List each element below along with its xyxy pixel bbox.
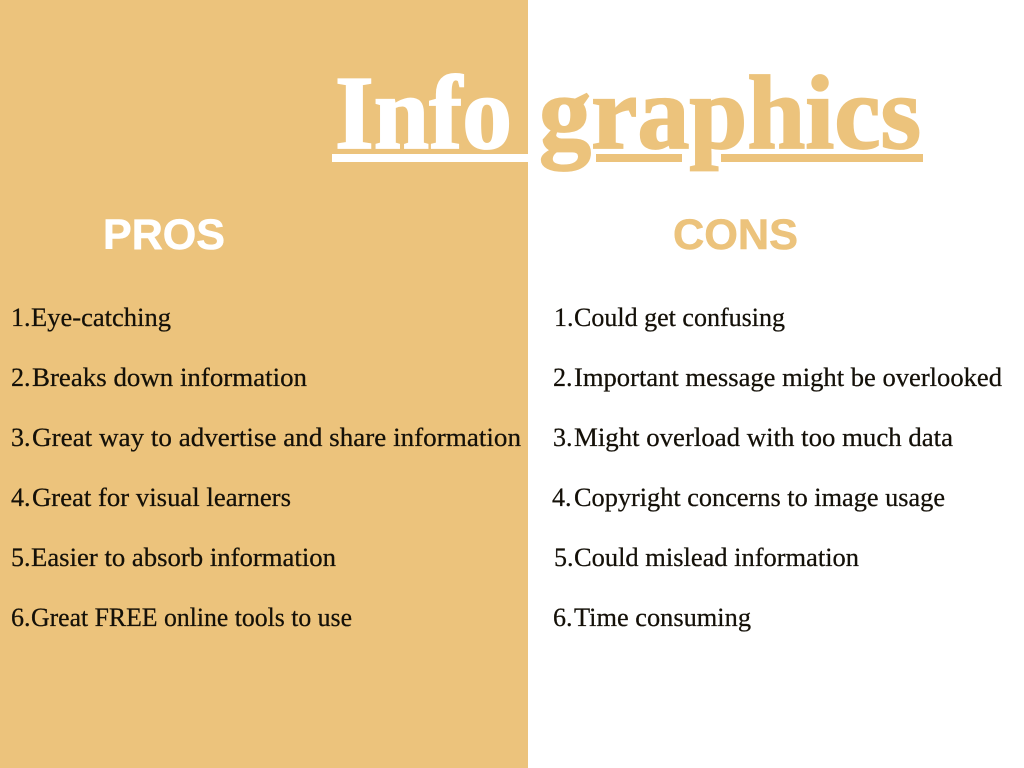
con 3: 3. [553,423,572,452]
title underline: white [332,154,528,162]
pro 6: Great FREE online tools to use [31,603,352,632]
list: cons [552,303,1002,632]
title word: graphics: graphics [539,54,921,171]
title [332,54,923,171]
con 6: 6. [553,603,572,632]
pro 2: 2. [11,363,30,392]
panel: pros background [0,0,528,768]
con 6: Time consuming [574,603,751,632]
pro 4: 4. [11,483,30,512]
pro 3: Great way to advertise and share information [32,423,521,452]
pro 3: 3. [11,423,30,452]
title word: Info: Info [335,54,512,171]
title underline: tan segments [596,154,923,162]
pro 6: 6. [11,603,30,632]
con 5: Could mislead information [574,543,859,572]
con 1: Could get confusing [574,303,785,332]
list: pros [11,303,521,632]
pro 5: Easier to absorb information [31,543,336,572]
con 4: 4. [552,483,572,512]
con 4: Copyright concerns to image usage [574,483,945,512]
con 3: Might overload with too much data [574,423,953,452]
heading: cons: CONS [673,211,798,259]
pro 4: Great for visual learners [32,483,291,512]
con 2: Important message might be overlooked [574,363,1002,392]
pro 1: 1. [11,303,30,332]
heading: pros: PROS [103,211,225,259]
pro 5: 5. [11,543,30,572]
con 1: 1. [554,303,574,332]
con 5: 5. [554,543,574,572]
con 2: 2. [553,363,572,392]
pro 1: Eye-catching [31,303,171,332]
pro 2: Breaks down information [32,363,307,392]
